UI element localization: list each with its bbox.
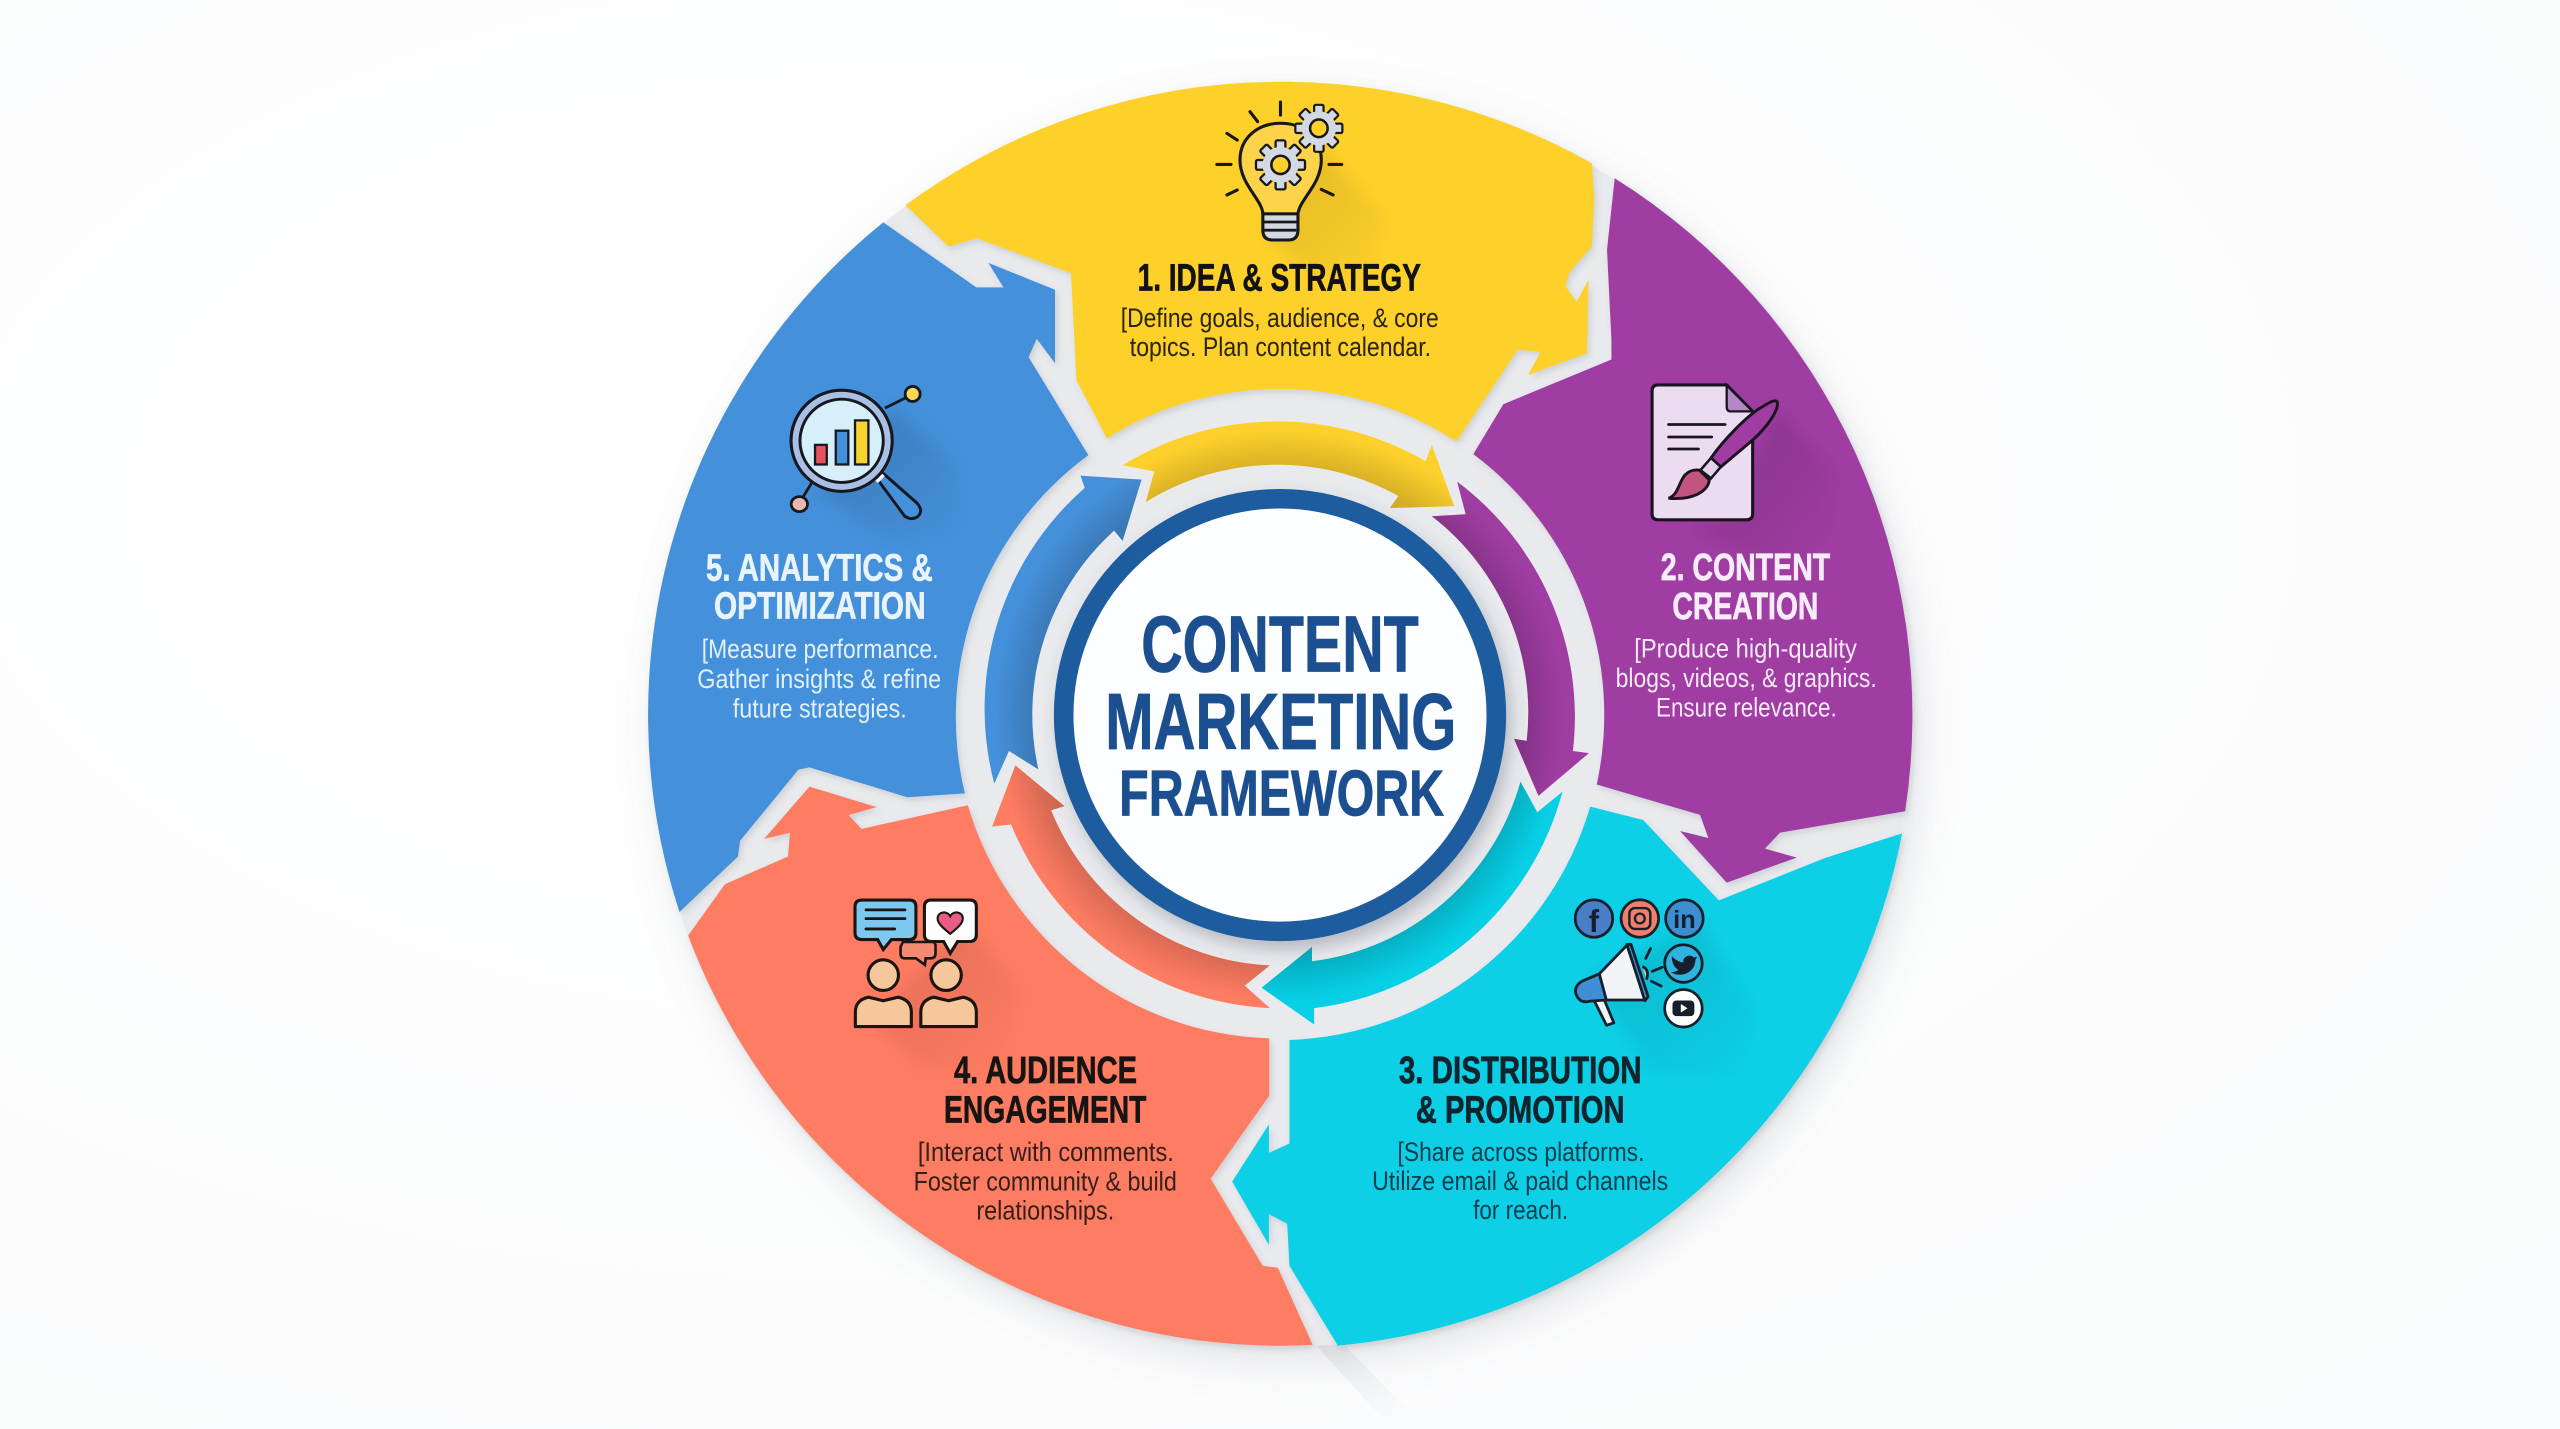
text: distribution and promotion description: [1372, 1137, 1668, 1225]
heading: analytics and optimization: 5. ANALYTICS &: [706, 546, 933, 589]
heading: audience engagement: 4. AUDIENCE: [954, 1049, 1137, 1092]
wheel base disc: [648, 83, 1912, 1347]
title: content marketing framework: FRAMEWORK: [1119, 757, 1444, 829]
heading: analytics and optimization: [706, 546, 933, 627]
arrow: blue cycle arrow: [985, 476, 1142, 784]
heading: audience engagement: ENGAGEMENT: [944, 1089, 1147, 1132]
panel: distribution and promotion segment: [1232, 807, 1902, 1346]
text: idea and strategy description: [Define goals, audience, & core: [1121, 303, 1439, 333]
text: analytics and optimization description: [Measure performance.: [702, 634, 938, 664]
heading: content creation: 2. CONTENT: [1661, 546, 1831, 589]
facebook badge: f: [1589, 904, 1600, 939]
icon: document and paint brush: [1652, 385, 1837, 575]
youtube badge: [1665, 990, 1702, 1027]
title: content marketing framework: [1105, 599, 1456, 829]
panel: analytics and optimization segment: [648, 222, 1088, 912]
linkedin badge: in: [1673, 906, 1696, 934]
arrow: purple cycle arrow: [1432, 482, 1589, 796]
panel: idea and strategy segment: [905, 82, 1594, 442]
heading: idea and strategy: 1. IDEA & STRATEGY: [1138, 257, 1421, 300]
framework wheel: [648, 82, 1912, 1347]
cast shadow streak: [1316, 1342, 1414, 1417]
text: distribution and promotion description: for reach.: [1473, 1195, 1568, 1225]
title: content marketing framework: CONTENT: [1141, 599, 1419, 688]
title: content marketing framework: MARKETING: [1105, 677, 1456, 766]
heading: content creation: [1661, 546, 1831, 628]
text: analytics and optimization description: future strategies.: [733, 694, 907, 724]
megaphone: [1575, 944, 1662, 1025]
heading: distribution and promotion: & PROMOTION: [1416, 1088, 1624, 1131]
center hub circle: [1064, 499, 1496, 931]
text: idea and strategy description: topics. Plan content calendar.: [1130, 332, 1431, 362]
text: audience engagement description: [Interact with comments.: [918, 1137, 1174, 1167]
icon: megaphone and social media: [1575, 900, 1755, 1078]
text: audience engagement description: [914, 1137, 1177, 1226]
icon: magnifying glass with bar chart: [791, 386, 955, 539]
panel: audience engagement segment: [688, 787, 1313, 1346]
text: analytics and optimization description: Gather insights & refine: [697, 664, 941, 694]
text: audience engagement description: Foster community & build: [914, 1167, 1177, 1197]
arrow: cyan cycle arrow: [1262, 782, 1562, 1024]
text: audience engagement description: relationships.: [976, 1196, 1114, 1226]
arrow: coral cycle arrow: [992, 765, 1270, 1008]
arrow: yellow cycle arrow: [1123, 421, 1454, 508]
text: content creation description: [Produce high-quality: [1634, 634, 1857, 664]
icon: light bulb with gears: [1217, 102, 1388, 281]
text: distribution and promotion description: [Share across platforms.: [1398, 1137, 1644, 1167]
text: distribution and promotion description: Utilize email & paid channels: [1372, 1166, 1668, 1196]
text: idea and strategy description: [1121, 303, 1439, 362]
linkedin badge: [1666, 900, 1703, 937]
heading: analytics and optimization: OPTIMIZATION: [714, 584, 926, 627]
heading: content creation: CREATION: [1672, 585, 1818, 628]
text: content creation description: blogs, videos, & graphics.: [1616, 663, 1877, 693]
heading: audience engagement: [944, 1049, 1147, 1132]
text: analytics and optimization description: [697, 634, 941, 724]
panel: content creation segment: [1473, 178, 1912, 883]
instagram badge: [1621, 900, 1659, 937]
text: content creation description: Ensure relevance.: [1656, 693, 1837, 723]
twitter badge: [1665, 945, 1702, 982]
icon: people in conversation: [855, 900, 1020, 1069]
text: content creation description: [1616, 634, 1877, 723]
heading: distribution and promotion: [1399, 1049, 1642, 1131]
heading: distribution and promotion: 3. DISTRIBUTION: [1399, 1049, 1642, 1092]
facebook badge: [1575, 900, 1613, 939]
